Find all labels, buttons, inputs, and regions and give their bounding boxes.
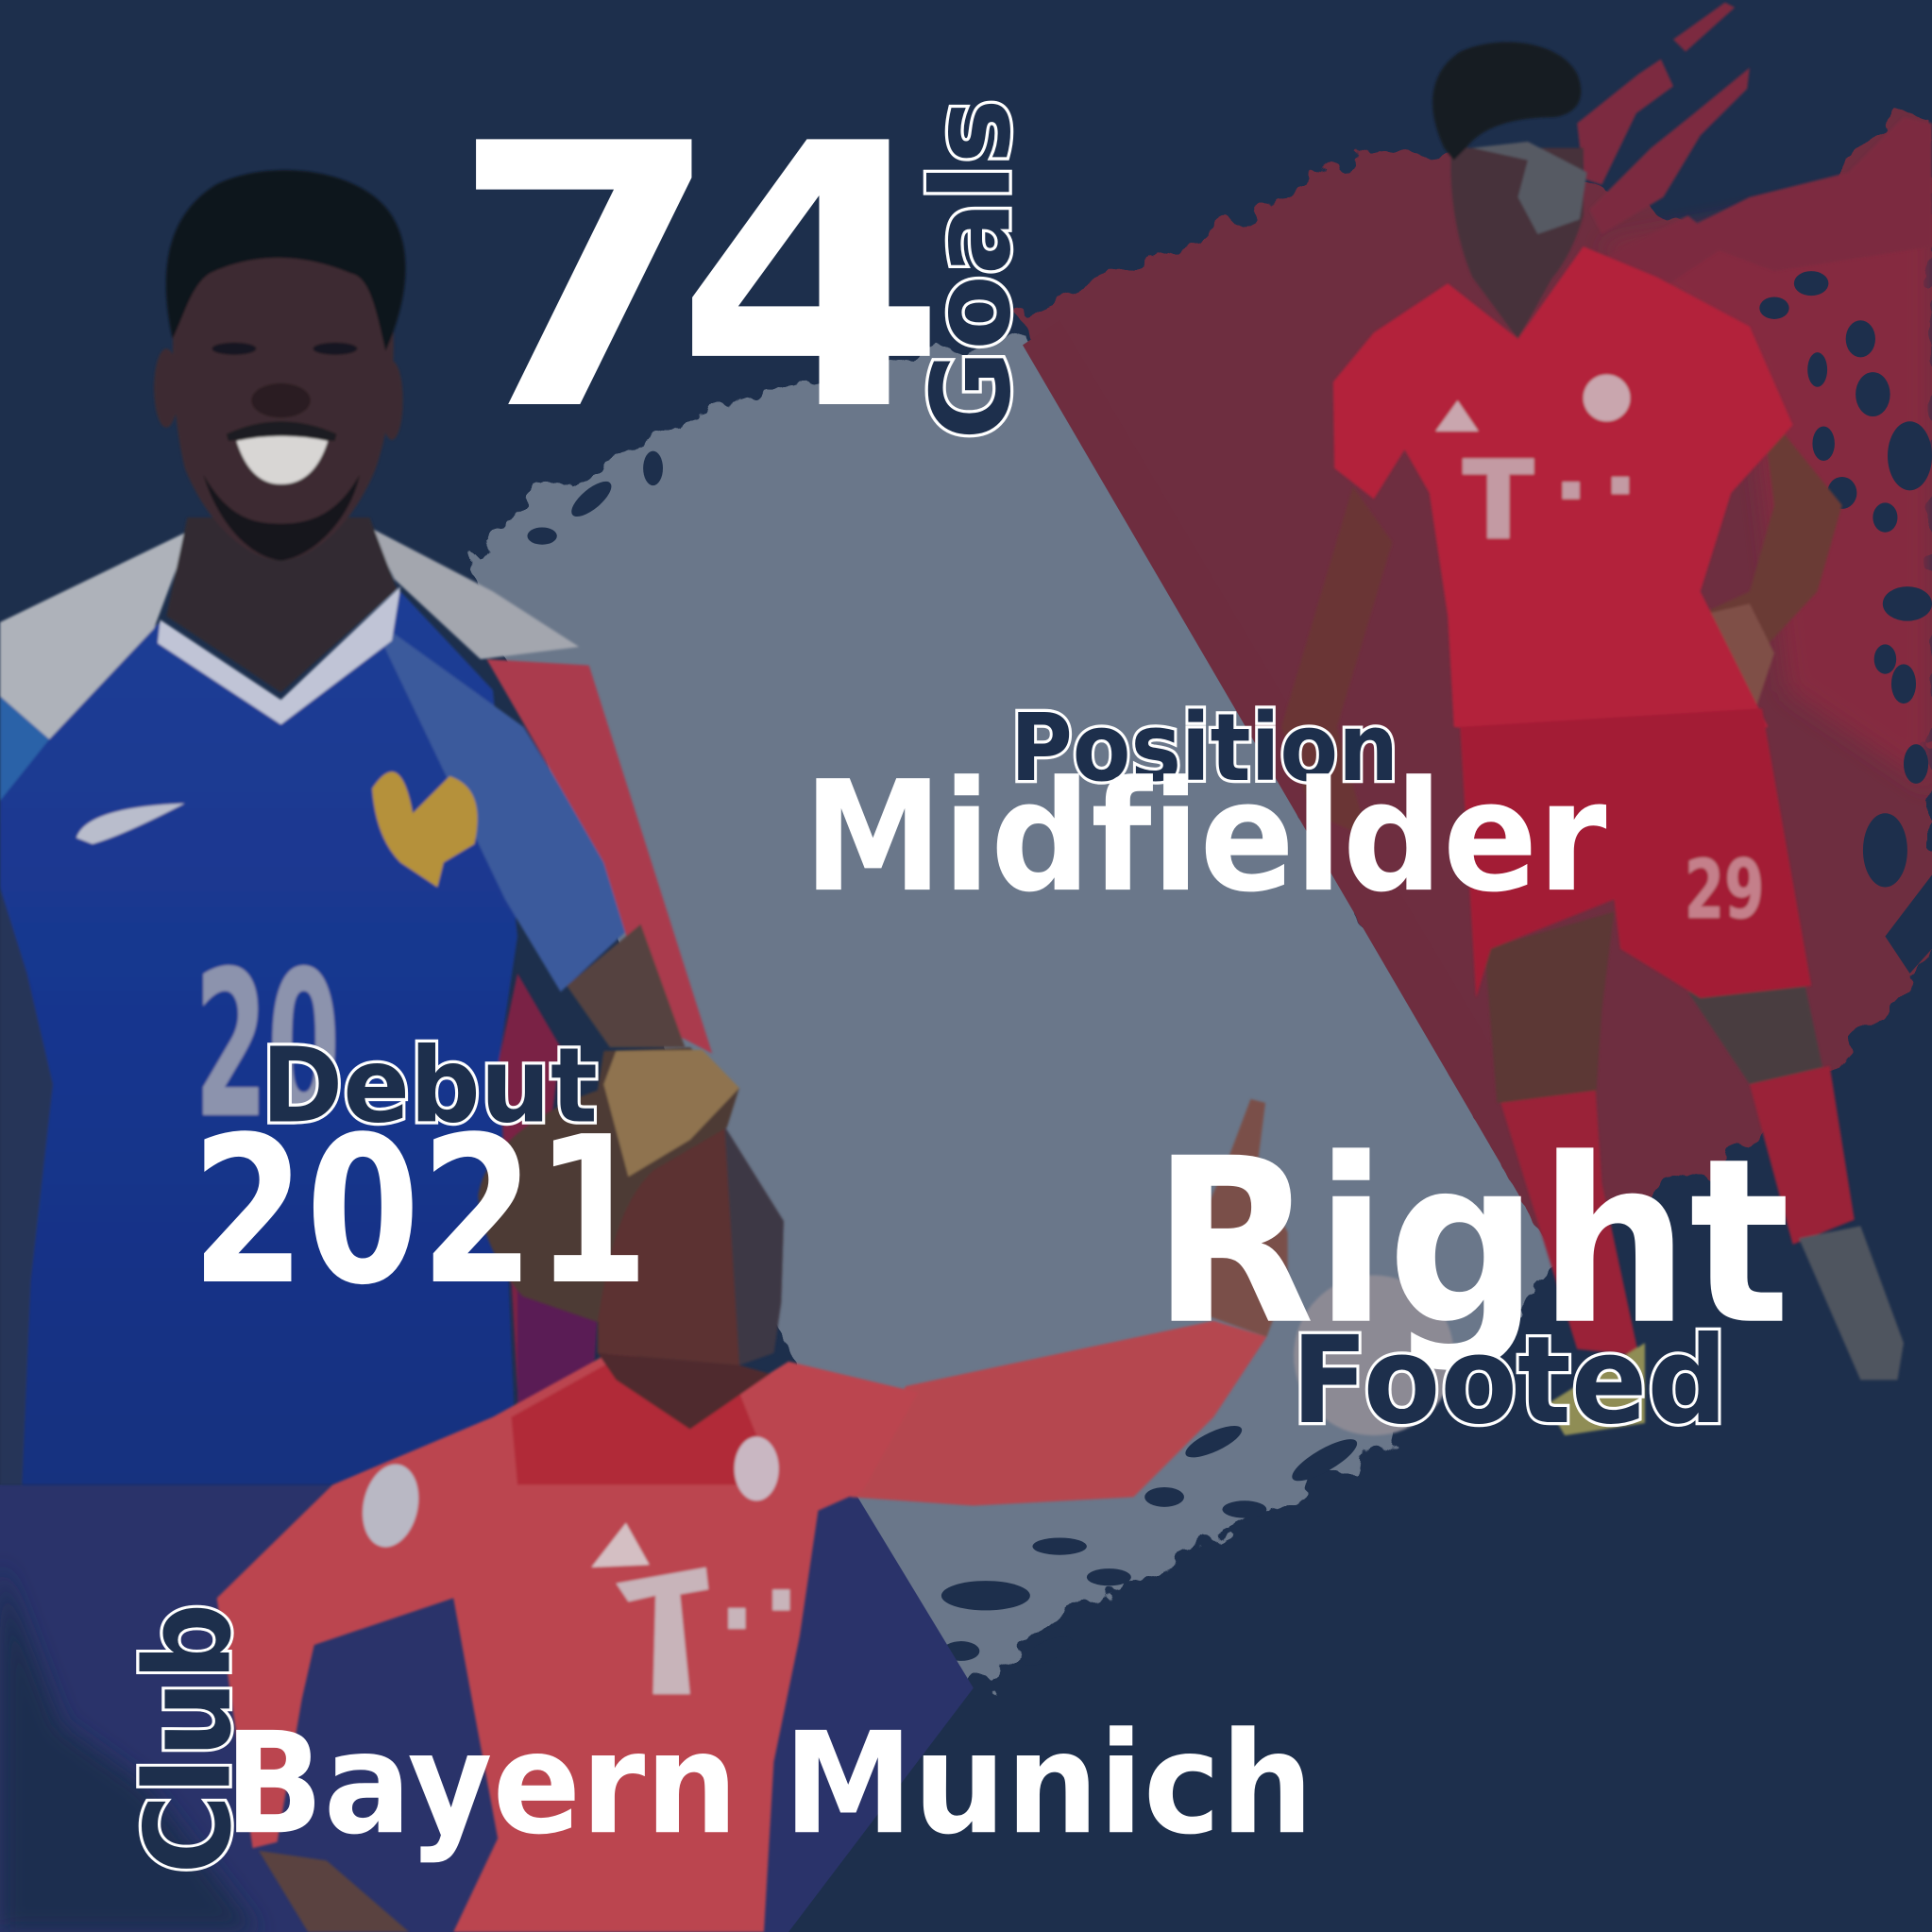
brush streaks top right [1577,3,1932,296]
label: Debut: Debut [262,1025,598,1145]
legs [1484,912,1614,1103]
hand [1201,1099,1288,1337]
smile [237,436,328,484]
badge: champions league [355,1459,426,1552]
stat: Midfielder: Midfielder [804,749,1607,926]
raised arm [850,1321,1266,1506]
stat: Bayern Munich: Bayern Munich [224,1703,1313,1866]
stat: Right: Right [1152,1110,1790,1375]
shirt [0,591,517,1484]
arms [1281,486,1392,838]
hair [478,1047,739,1322]
player: France shirt portrait [0,170,712,1484]
crest [735,1436,779,1500]
lower-left blue panel [0,1484,974,1932]
beard [203,474,360,561]
hair [1432,42,1581,161]
shorts [1460,708,1811,998]
torso and sleeve [217,1349,918,1932]
label: Footed: Footed [1291,1311,1727,1451]
socks [1500,1091,1638,1355]
face reflection [1472,142,1587,234]
logo: swoosh [76,804,185,844]
neck [598,1353,771,1430]
brush stroke: red [1016,3,1932,1245]
ball [1294,1276,1454,1435]
label: Goals: Goals [909,98,1036,440]
neck [166,517,397,692]
shirt number 29: 29 [1685,843,1765,938]
stat: 74: 74 [449,68,948,490]
boots [1799,1226,1904,1380]
player: Bayern running (right) [1281,42,1904,1435]
ears [154,348,178,428]
moustache [228,425,335,437]
face [598,1127,784,1365]
neck and face [1450,148,1584,339]
brush stroke: grey band [468,320,1602,1694]
hand [1669,603,1774,727]
logo: T [616,1568,789,1694]
flag and cape [486,659,712,1054]
eyes [212,343,256,355]
arm [567,924,685,1047]
nose [251,383,311,417]
icon: rooster crest [372,771,478,887]
player: Bayern celebrating (bottom) [217,1047,1288,1932]
crest [1584,375,1630,421]
logo: adidas [1435,400,1479,432]
lower hand [259,1851,409,1932]
logo: T [1463,458,1629,538]
stat: 2021: 2021 [191,1093,650,1330]
shirt number 20: 20 [195,928,340,1163]
shoulder sleeve [369,616,641,991]
label: Position: Position [1010,694,1398,803]
logo: adidas [591,1523,650,1568]
face [173,240,394,561]
hair [166,170,405,351]
shirt [1333,246,1793,752]
label: Club: Club [120,1603,258,1874]
